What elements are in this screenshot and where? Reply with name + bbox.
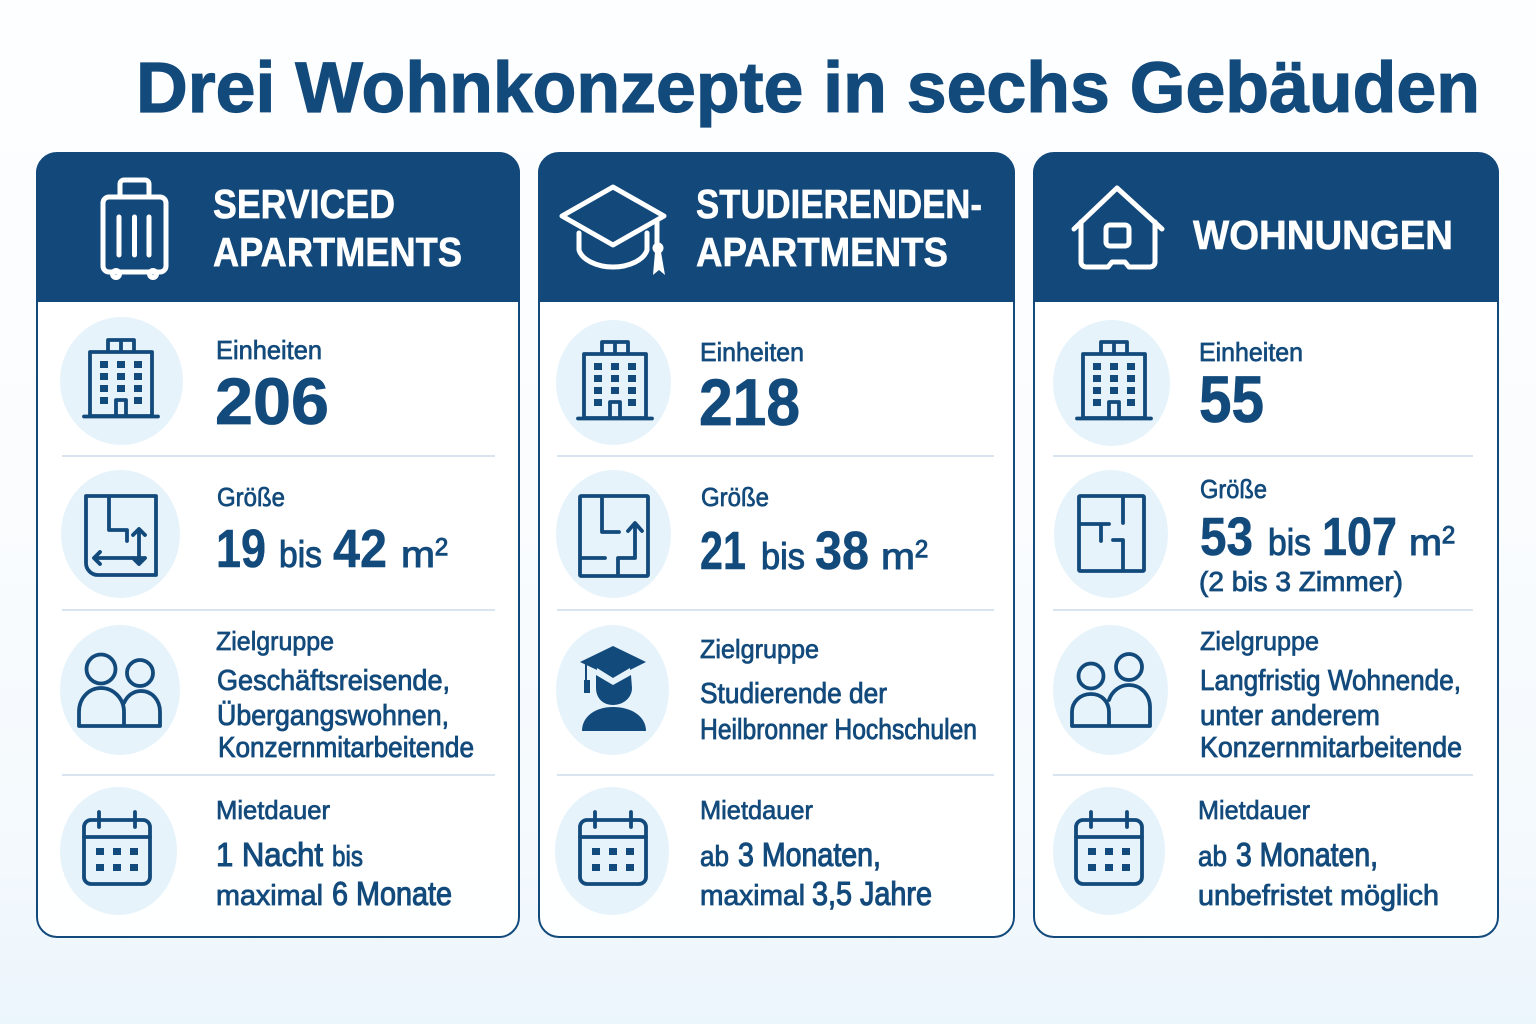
row: Mietdauer — [1053, 787, 1439, 915]
row: Zielgruppe: Zielgruppe — [1200, 626, 1319, 656]
row: Größe: m — [1409, 522, 1442, 563]
row: Größe: 42 — [333, 519, 387, 579]
icon: house — [1074, 188, 1162, 267]
row: Mietdauer: 3 Monaten, — [1236, 836, 1378, 873]
row: Größe: 21 — [700, 521, 746, 581]
panel: serviced apartments — [36, 153, 520, 937]
row: Einheiten: 55 — [1199, 362, 1264, 436]
row: Mietdauer: unbefristet möglich — [1198, 880, 1439, 912]
row: Einheiten — [1053, 320, 1303, 446]
row: Einheiten: Einheiten — [1199, 337, 1303, 367]
row: Mietdauer: Mietdauer — [1198, 795, 1310, 825]
row: Mietdauer: maximal — [216, 880, 323, 912]
row: Größe: bis — [1268, 522, 1311, 563]
row: Größe: m — [881, 536, 915, 577]
heading: STUDIERENDEN- — [696, 181, 982, 227]
row: Mietdauer: 1 Nacht — [216, 836, 323, 873]
icon: suitcase — [103, 180, 166, 278]
heading — [696, 181, 982, 275]
row: Zielgruppe: Studierende der — [700, 678, 887, 710]
row: Einheiten: Einheiten — [216, 335, 322, 365]
row: Einheiten — [556, 320, 804, 445]
row: Mietdauer — [555, 787, 932, 915]
row: Zielgruppe — [556, 625, 977, 755]
row: Mietdauer: 6 Monate — [332, 875, 452, 912]
row: Größe: Größe — [701, 482, 769, 512]
row: Größe: m — [401, 534, 435, 575]
row: Größe: bis — [279, 534, 322, 575]
row: Mietdauer: ab — [700, 841, 729, 873]
heading — [213, 181, 462, 275]
panel: studierenden-apartments — [538, 153, 1015, 937]
icon: graduation cap outline — [562, 187, 665, 275]
heading: SERVICED — [213, 181, 395, 227]
panel: wohnungen — [1033, 153, 1499, 937]
row: Größe: 53 — [1200, 507, 1253, 567]
card body — [1034, 153, 1498, 937]
row: Größe — [556, 470, 928, 598]
row: Zielgruppe — [60, 625, 474, 764]
row: Zielgruppe: Heilbronner Hochschulen — [700, 714, 977, 746]
row: Mietdauer: 3 Monaten, — [738, 836, 881, 873]
row: Einheiten: 218 — [699, 365, 800, 439]
row: Einheiten: Einheiten — [700, 337, 804, 367]
heading: APARTMENTS — [696, 229, 948, 275]
heading: WOHNUNGEN — [1193, 212, 1453, 258]
row: Mietdauer: bis — [332, 841, 363, 873]
header bar — [538, 153, 1015, 302]
row: Größe: 107 — [1322, 507, 1397, 567]
row: Größe — [61, 470, 448, 598]
row: Mietdauer: maximal — [700, 880, 805, 912]
title: Drei Wohnkonzepte in sechs Gebäuden — [136, 49, 1480, 128]
header bar — [36, 153, 520, 302]
row: Mietdauer: Mietdauer — [700, 795, 813, 825]
row: Größe: Größe — [217, 482, 285, 512]
row: Größe: ² — [435, 529, 448, 576]
row: Größe: 38 — [815, 521, 869, 581]
row: Größe: bis — [761, 536, 805, 577]
card body — [539, 153, 1014, 937]
row: Zielgruppe: Langfristig Wohnende, — [1200, 665, 1461, 697]
row: Mietdauer: ab — [1198, 841, 1227, 873]
header bar — [1033, 153, 1499, 302]
row: Mietdauer — [60, 787, 452, 915]
row: Zielgruppe: Konzernmitarbeitende — [1200, 732, 1462, 764]
row: Mietdauer: 3,5 Jahre — [812, 875, 932, 912]
row: Zielgruppe: unter anderem — [1200, 700, 1380, 732]
row: Einheiten — [60, 317, 329, 445]
row: Zielgruppe: Zielgruppe — [216, 626, 334, 656]
row: Zielgruppe: Geschäftsreisende, — [217, 665, 450, 697]
row: Größe: ² — [1442, 517, 1455, 564]
row: Einheiten: 206 — [215, 364, 329, 438]
row: Zielgruppe — [1053, 625, 1462, 764]
row: Mietdauer: Mietdauer — [216, 795, 330, 825]
row: Größe: 19 — [216, 519, 266, 579]
row: Größe: Größe — [1200, 474, 1267, 504]
card body — [37, 153, 519, 937]
row: Zielgruppe: Konzernmitarbeitende — [218, 732, 474, 764]
heading: APARTMENTS — [213, 229, 462, 275]
row: Größe: (2 bis 3 Zimmer) — [1199, 566, 1403, 597]
row: Größe — [1054, 470, 1455, 598]
row: Zielgruppe: Übergangswohnen, — [217, 700, 449, 732]
row: Größe: ² — [915, 531, 928, 578]
row: Zielgruppe: Zielgruppe — [700, 634, 819, 664]
